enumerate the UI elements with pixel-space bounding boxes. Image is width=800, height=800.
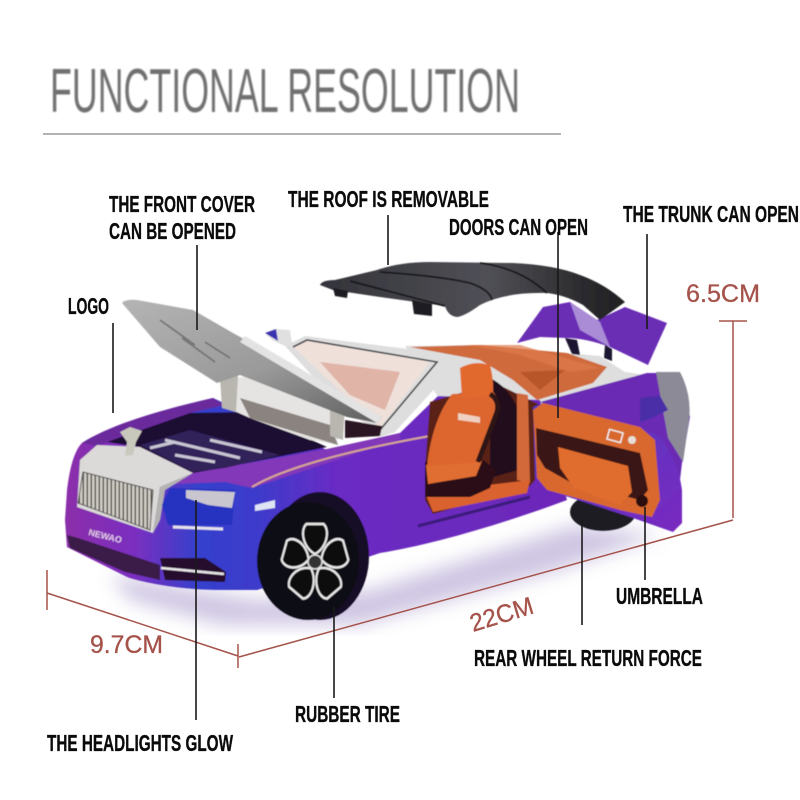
- pinstripe: [252, 436, 430, 487]
- car body: [65, 396, 567, 590]
- label: front cover: THE FRONT COVER: [109, 191, 255, 217]
- label: doors: DOORS CAN OPEN: [449, 214, 588, 240]
- dimension: 9.7cm: 9.7CM: [90, 631, 163, 659]
- dimension: 22cm: [239, 520, 733, 657]
- firewall and struts: [232, 376, 338, 445]
- purple hood strip: [82, 398, 225, 446]
- silver hood nose: [77, 445, 193, 533]
- wheel arch: [271, 492, 369, 620]
- bumper logo text: NEWAO: [88, 527, 123, 545]
- upper fender highlight: [175, 433, 400, 488]
- orange interior deck: [410, 345, 607, 400]
- label: umbrella: UMBRELLA: [616, 583, 703, 609]
- removable roof: [320, 262, 625, 320]
- white rear deck: [405, 345, 655, 404]
- front wheel: [257, 502, 359, 620]
- dimension: 9.7cm: [47, 570, 238, 668]
- rear wheel: [570, 493, 636, 531]
- sill line: [418, 497, 530, 526]
- car illustration: [65, 262, 690, 625]
- front seat: [425, 363, 498, 497]
- dimension: 6.5cm: [686, 280, 760, 518]
- ground shadow: [110, 525, 660, 625]
- label: front cover: [109, 191, 255, 244]
- open door: [533, 403, 682, 532]
- windshield: [285, 336, 458, 437]
- label: headlights: THE HEADLIGHTS GLOW: [47, 730, 233, 756]
- label: front cover: CAN BE OPENED: [109, 218, 236, 244]
- open hood: [122, 300, 382, 423]
- label: rubber tire: RUBBER TIRE: [295, 701, 400, 727]
- headlight: [162, 488, 235, 529]
- doorway: [425, 383, 540, 514]
- label: roof: THE ROOF IS REMOVABLE: [288, 186, 489, 212]
- hood ornament: [120, 427, 142, 456]
- leader lines: [113, 215, 647, 720]
- grille: [78, 472, 153, 530]
- trunk lid: [517, 302, 667, 365]
- dimension: 6.5cm: 6.5CM: [686, 280, 760, 308]
- rear fender: [540, 373, 690, 480]
- bumper and vents: [67, 535, 226, 582]
- fender vent: [255, 500, 275, 511]
- label: logo: LOGO: [68, 293, 109, 319]
- engine bay: [107, 412, 327, 473]
- mirror: [265, 329, 292, 346]
- dimension: 22cm: 22CM: [467, 592, 537, 638]
